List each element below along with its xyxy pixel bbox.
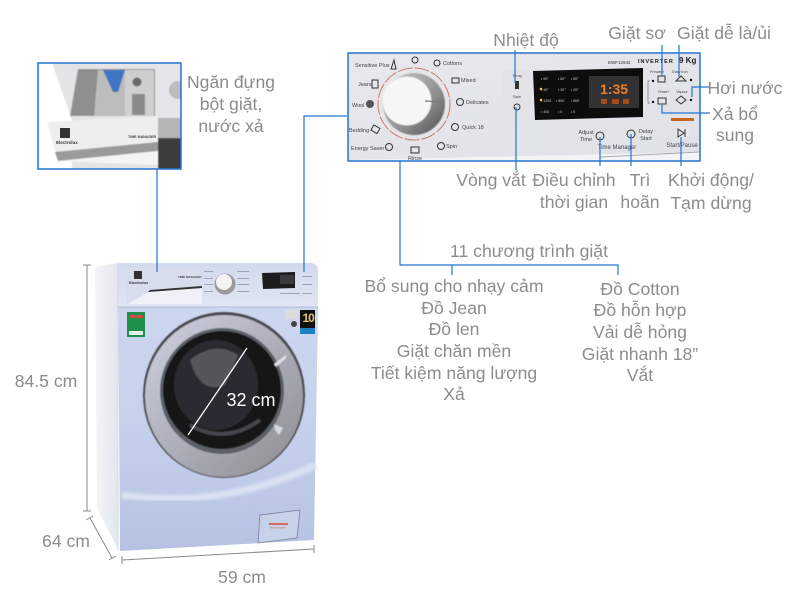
list: programmes left [365, 276, 543, 404]
label: rinse plus [712, 104, 758, 145]
label: prewash: Giặt sơ [608, 23, 666, 43]
list: programmes right: Đồ Cotton [600, 279, 680, 299]
panel: drawer inset photo [38, 63, 187, 169]
connector: easy iron [678, 45, 680, 77]
dimension: depth [42, 516, 116, 560]
label: delay: Trì [630, 170, 650, 190]
dial programme labels: Spin [446, 144, 457, 150]
label: time adjust [532, 170, 616, 212]
display: • 800 [556, 99, 564, 103]
display [533, 68, 643, 120]
connector: delay start [630, 134, 632, 166]
list: programmes right: Giặt nhanh 18” [582, 344, 698, 364]
dimension: depth: 64 cm [42, 531, 90, 551]
text: drawer brand [56, 128, 157, 145]
display: • 90° [541, 77, 549, 81]
dial programme labels: Rinse [408, 156, 422, 162]
washing machine photo [95, 263, 318, 551]
certification stickers [285, 310, 298, 327]
dimension: width [122, 545, 314, 587]
label: drawer: bột giặt, [200, 94, 262, 114]
dial programme labels: Energy Saver [351, 146, 384, 152]
list: programmes right: Vải dễ hỏng [593, 321, 687, 342]
temp and spin buttons [503, 70, 533, 120]
start/pause button: Start/Pause [666, 143, 698, 149]
label: rinse plus: sung [716, 125, 754, 145]
dial programme labels: Bedding [349, 128, 369, 134]
time manager controls: Start [640, 136, 652, 142]
dial programme labels: Jeans [358, 82, 373, 88]
label: vapour: Hơi nước [708, 78, 783, 98]
connector: programme bracket [400, 161, 618, 275]
model text: EWF12942 [608, 60, 631, 65]
dial programme labels: Cottons [443, 61, 462, 67]
connector: rinse plus [662, 105, 710, 113]
time manager controls: Time Manager [598, 145, 636, 151]
time manager controls: Delay [639, 129, 653, 135]
label: delay: hoãn [620, 192, 660, 212]
connector: temperature [514, 50, 516, 83]
label: temperature: Nhiệt độ [493, 30, 559, 50]
dial programme labels: Quick 18 [462, 125, 484, 131]
list: programmes left: Tiết kiệm năng lượng [371, 363, 537, 383]
display: 1:35 [600, 81, 628, 97]
connector: start pause [680, 137, 682, 166]
list: programmes right [582, 279, 698, 385]
dimension: height [15, 265, 91, 511]
display: • 0 [571, 110, 575, 114]
text: drawer brand: Electrolux [56, 140, 78, 145]
connector: time adjust [599, 137, 601, 166]
side panel seam [117, 263, 119, 551]
connector: prewash [661, 45, 663, 76]
list: programmes right: Đồ hỗn hợp [594, 299, 687, 320]
time manager controls [578, 129, 653, 151]
dial programme labels: Mixed [461, 78, 476, 84]
dial programme labels: Delicates [466, 100, 489, 106]
warranty badge [300, 310, 315, 334]
dial programme labels [349, 57, 489, 162]
heading: programmes: 11 chương trình giặt [450, 241, 608, 261]
display: • 40° [541, 88, 549, 92]
warranty badge: 10 [302, 311, 315, 325]
model text [608, 56, 696, 65]
door [143, 312, 305, 478]
label: easy iron: Giặt dễ là/ủi [677, 22, 771, 43]
drawer front: Electrolux [129, 280, 149, 285]
label: drawer [187, 72, 275, 136]
display: • 50° [571, 77, 579, 81]
label: drawer: nước xả [198, 116, 264, 136]
right option buttons: Rinse+ [658, 90, 670, 94]
display: • 60° [558, 77, 566, 81]
mini control panel [204, 271, 312, 294]
display: • 600 [571, 99, 579, 103]
temp and spin buttons: Spin [513, 94, 521, 99]
label: start pause: Khởi động/ [668, 170, 754, 190]
label: start pause [668, 170, 754, 213]
list: programmes left: Đồ Jean [421, 298, 487, 318]
list: programmes left: Bổ sung cho nhạy cảm [365, 276, 543, 296]
connector: drawer to machine [156, 169, 158, 272]
energy label [127, 312, 145, 337]
dial [378, 68, 450, 140]
right option buttons: Vapour [676, 90, 688, 94]
right option buttons [648, 70, 692, 104]
label: time adjust: Điều chỉnh [532, 170, 616, 190]
connector: spin [515, 107, 517, 170]
display: • 400 [541, 110, 549, 114]
dial programme labels: Wool [352, 103, 364, 109]
time manager controls: Time [580, 137, 592, 143]
connector: panel to machine [304, 116, 347, 272]
service panel [258, 510, 300, 543]
dimension: door diameter [188, 348, 276, 435]
model text: 9 Kg [679, 56, 696, 65]
list: programmes left: Xả [443, 384, 465, 404]
connector: vapour [692, 87, 710, 97]
display: • 20° [571, 88, 579, 92]
display: • 1200 [541, 99, 551, 103]
label: spin: Vòng vắt [456, 169, 526, 190]
time manager controls: Adjust [578, 130, 594, 136]
label: time adjust: thời gian [540, 192, 608, 212]
list: programmes left: Đồ len [429, 319, 479, 339]
right option buttons: Easy Iron [672, 70, 688, 74]
text: drawer brand: TIME MANAGER [128, 135, 157, 139]
start/pause button [666, 118, 698, 149]
label: rinse plus: Xả bổ [712, 104, 758, 124]
label: delay [620, 170, 660, 212]
display: • 30° [558, 88, 566, 92]
list: programmes left: Giặt chăn mền [397, 341, 511, 361]
label: start pause: Tạm dừng [670, 193, 752, 213]
list: programmes right: Vắt [627, 364, 653, 385]
dimension: width: 59 cm [218, 567, 266, 587]
dial programme labels: Sensitive Plus [355, 63, 390, 69]
drawer front [126, 267, 202, 304]
temp and spin buttons: Temp [512, 73, 523, 78]
model text: INVERTER [638, 59, 674, 65]
dimension: height: 84.5 cm [15, 371, 77, 391]
right option buttons: Prewash [650, 70, 664, 74]
drawer front: TIME MANAGER [178, 275, 202, 279]
label: drawer: Ngăn đựng [187, 72, 275, 92]
display: • 0 [558, 110, 562, 114]
dimension: door diameter: 32 cm [226, 390, 276, 410]
panel: control panel close-up [348, 53, 700, 162]
